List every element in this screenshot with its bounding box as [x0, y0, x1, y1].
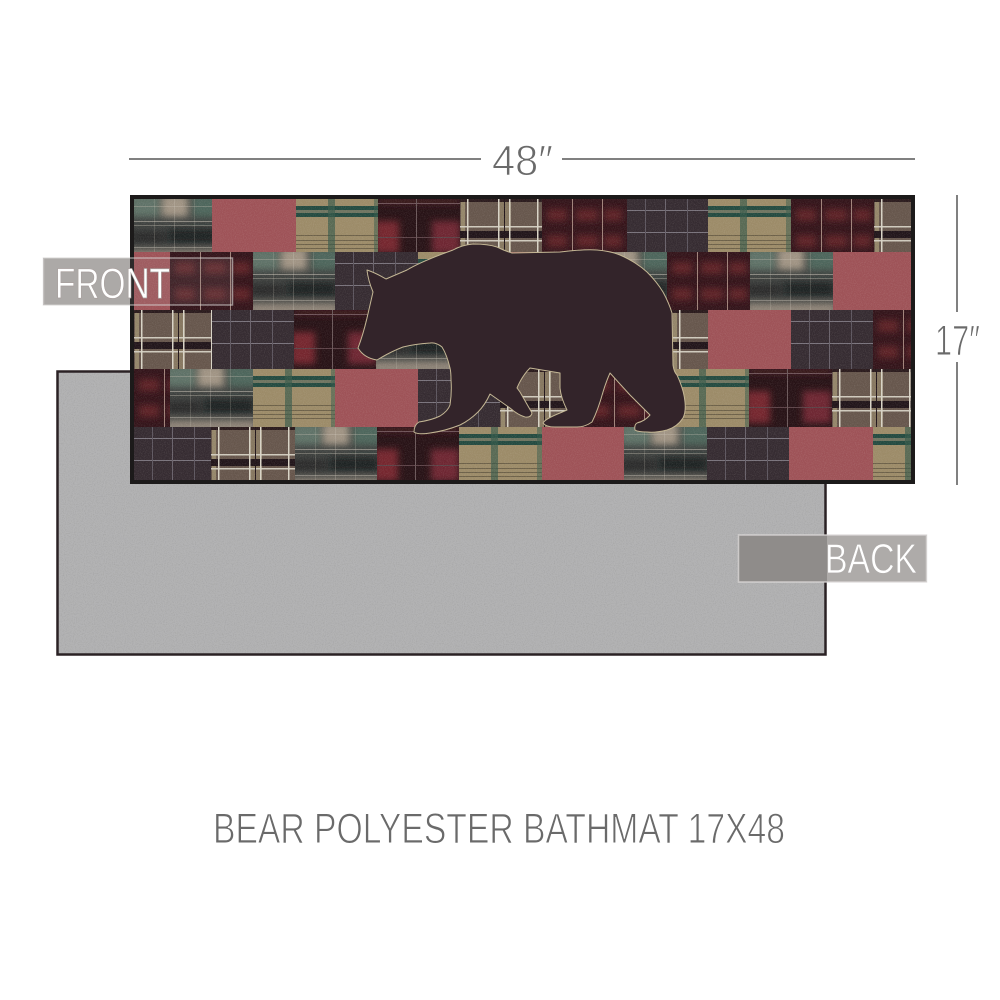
callout: FRONT label: FRONT [55, 260, 170, 308]
panel: front of mat [130, 195, 964, 491]
dimension: height 17 inches: 17″ [935, 317, 980, 365]
patchwork row 4 [134, 365, 922, 433]
title: BEAR POLYESTER BATHMAT 17X48 [213, 805, 785, 853]
callout: BACK label: BACK [825, 535, 917, 582]
patchwork row 2 [134, 248, 923, 316]
patchwork row 3 [134, 306, 963, 374]
dimension: width 48 inches: 48″ [492, 137, 553, 185]
callout: BACK label [738, 535, 927, 582]
panel: back of mat [58, 372, 826, 654]
patchwork row 1 [130, 195, 964, 263]
bear silhouette [358, 244, 685, 434]
patchwork row 5 [134, 423, 963, 491]
